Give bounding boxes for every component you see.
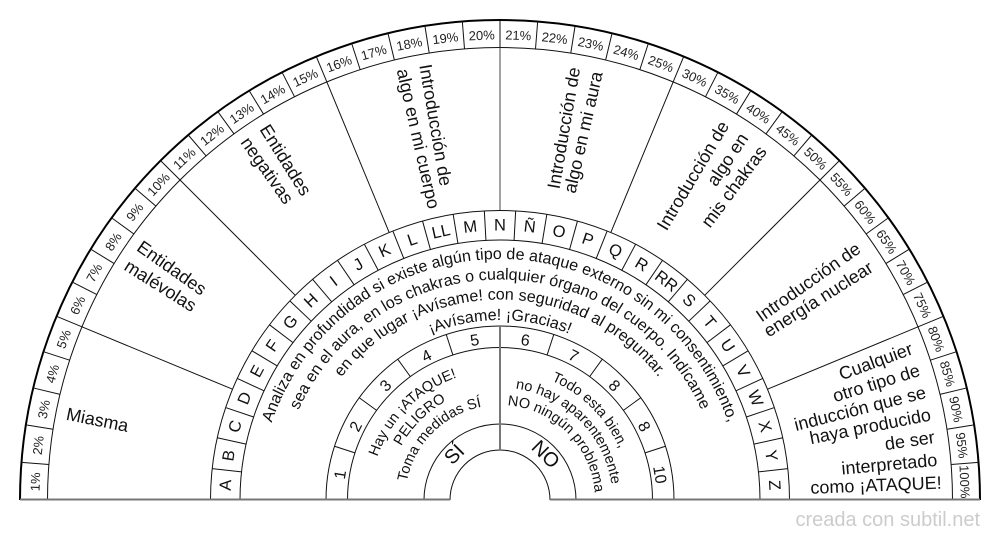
numbers ring labels: 3 [377,377,395,395]
percent ring labels: 16% [324,52,354,75]
sector label: Entidades malévolas [121,237,210,316]
percent ring labels: 13% [227,100,257,127]
alphabet ring letters: B [219,449,239,462]
text block: attack warning: PELIGRO [393,394,444,446]
alphabet ring letters: LL [430,221,452,243]
alphabet ring letters: X [754,419,775,434]
sector label: Entidades negativas [237,121,315,208]
percent ring labels: 100% [956,465,973,499]
alphabet ring letters: P [580,230,596,250]
sector label: Introducción de algo en mi cuerpo: algo en mi cuerpo [393,67,444,211]
percent ring labels: 17% [359,42,389,63]
alphabet ring letters: Ñ [523,216,537,237]
numbers ring arcs [326,326,674,500]
percent ring labels: 80% [925,324,948,354]
ring: numbers 1 to 10 [326,326,674,500]
percent ring labels: 4% [43,362,62,385]
sector label: Cualquier otro tipo de inducción: haya producido [808,405,933,448]
numbers ring labels: 6 [519,332,531,350]
sector label: Introducción de algo en mis chakras: algo en [703,129,752,190]
sector label: Introducción de algo en mi aura: algo en mi aura [560,69,607,195]
ring: alphabet [210,211,790,500]
percent ring labels: 12% [197,121,227,149]
percent ring labels: 75% [910,290,935,321]
alphabet ring letters: R [632,254,651,276]
percent ring labels: 60% [851,197,879,227]
sector divider lines [82,48,918,389]
sector label: Introducción de algo en mi cuerpo: Introducción de [415,63,456,187]
sector label: Miasma: Miasma [65,404,131,436]
percent ring labels: 65% [873,227,900,257]
sector label: Cualquier otro tipo de inducción: inducción que se [792,382,928,435]
sector label: Cualquier otro tipo de inducción: Cualquier [836,339,915,384]
alphabet ring letters: RR [651,267,681,296]
percent ring labels: 85% [937,359,958,389]
alphabet ring letters: O [551,222,567,242]
text block: attack warning: Hay un ¡ATAQUE! [368,368,456,456]
text block: attack warning: Toma medidas SÍ [397,394,480,480]
sector label: Entidades malévolas: Entidades [133,237,210,299]
alphabet ring letters: Z [765,480,783,491]
alphabet ring letters: F [263,337,283,355]
sector label: Cualquier otro tipo de inducción: como ¡ATAQUE! [810,473,942,498]
alphabet ring letters: A [217,479,235,491]
text block: attack warning [368,368,480,480]
sector labels [65,63,942,498]
percent ring labels: 24% [612,42,641,63]
numbers ring labels: 10 [649,465,669,485]
alphabet ring dividers [212,211,788,472]
sector label: Introducción de energía nuclear: energía nuclear [760,257,877,341]
alphabet ring letters: Y [761,449,781,462]
alphabet ring letters: I [327,273,341,290]
numbers ring labels: 7 [565,347,581,366]
percent ring labels: 7% [83,261,106,285]
watermark: creada con subtil.net [795,509,980,531]
numbers ring labels: 1 [332,469,350,481]
alphabet ring letters: V [732,362,753,381]
percent ring labels: 1% [27,472,43,491]
percent ring labels: 8% [102,229,125,254]
sector label: Cualquier otro tipo de inducción: otro tipo de [830,360,922,406]
percent ring labels: 14% [258,81,288,107]
numbers ring labels: 5 [469,332,481,350]
alphabet ring letters: N [494,216,506,234]
inner ring arcs [424,424,576,500]
curved instruction text: sea en el aura, en los chakras o cualquier órgano del cuerpo. Indícame [292,268,708,410]
alphabet ring letters: L [405,230,420,250]
percent ring labels: 25% [646,52,676,75]
sector label: Introducción de algo en mis chakras: mis chakras [697,142,771,231]
alphabet ring arcs [210,211,790,500]
percent ring labels: 3% [35,398,53,420]
text block: all clear: Todo esta bien, [554,372,624,448]
percent ring labels: 23% [576,34,605,54]
curved instruction text: en que lugar ¡Avísame! con seguridad al preguntar. [336,289,663,376]
sector label: Entidades negativas: Entidades [256,121,315,199]
sector label: Entidades malévolas: malévolas [121,256,200,316]
sector label: Cualquier otro tipo de inducción: interpretado [841,450,938,479]
percent ring labels: 55% [827,170,856,199]
percent ring labels: 21% [505,27,532,43]
sector label: Cualquier otro tipo de inducción: de ser [884,427,936,454]
sector label: Cualquier otro tipo de inducción [792,339,942,498]
curved instruction text: ¡Avísame! ¡Gracias! [429,308,572,336]
percent ring labels: 90% [946,395,966,424]
alphabet ring letters: E [247,362,268,381]
sector label: Introducción de algo en mis chakras [653,118,771,234]
label: NO: NO [527,436,564,473]
alphabet ring letters [217,216,783,491]
percent ring labels: 11% [170,144,199,173]
percent ring dividers [21,20,979,464]
numbers ring labels: 8 [634,419,653,435]
percent ring labels: 40% [743,100,774,127]
percent ring labels: 22% [541,29,569,47]
percent ring labels: 35% [712,81,743,107]
percent ring labels: 18% [395,34,424,54]
alphabet ring letters: C [225,418,246,435]
percent ring labels: 9% [123,200,147,224]
numbers ring labels: 4 [419,347,435,366]
percent ring labels: 45% [773,121,803,149]
sector label: Entidades negativas: negativas [237,133,298,208]
alphabet ring letters: J [350,255,367,275]
alphabet ring letters: D [234,389,256,407]
numbers ring dividers [335,335,665,453]
text block: all clear: NO ningún problema [508,395,602,493]
percent ring labels: 20% [468,27,495,43]
alphabet ring letters: K [376,240,394,261]
centre axis and baseline [20,326,980,500]
alphabet ring letters: S [679,290,699,311]
sector label: Introducción de algo en mi aura: Introducción de [544,66,584,190]
percent ring labels: 50% [801,144,831,173]
numbers ring labels: 8 [605,377,623,395]
percent ring labels: 19% [432,29,460,47]
percent ring labels: 5% [53,327,74,350]
percent ring labels: 95% [953,432,971,460]
curved instruction text: Analiza en profundidad si existe algún tipo de ataque externo sin mi consentimiento, [262,248,734,423]
percent ring labels: 6% [67,293,89,317]
label: SÍ: SÍ [440,439,470,469]
alphabet ring letters: U [716,336,738,356]
percent ring labels: 2% [30,435,47,456]
alphabet ring letters: M [462,217,478,237]
inner rings: yes and no [424,424,576,500]
sector label: Introducción de energía nuclear: Introducción de [752,238,864,326]
percent ring labels: 15% [290,65,321,90]
percent ring labels: 30% [680,65,710,90]
sector label: Introducción de algo en mis chakras: Introducción de [653,118,733,234]
alphabet ring letters: W [744,388,766,409]
percent ring labels: 10% [144,169,173,199]
numbers ring labels: 2 [347,419,366,435]
alphabet ring letters: Q [606,240,625,262]
text block: all clear: no hay aparentemente [516,381,619,484]
alphabet ring letters: H [301,290,322,311]
alphabet ring letters: T [699,313,719,332]
alphabet ring letters: G [280,312,302,333]
percent ring labels: 70% [893,258,919,288]
numbers ring labels [332,332,669,485]
